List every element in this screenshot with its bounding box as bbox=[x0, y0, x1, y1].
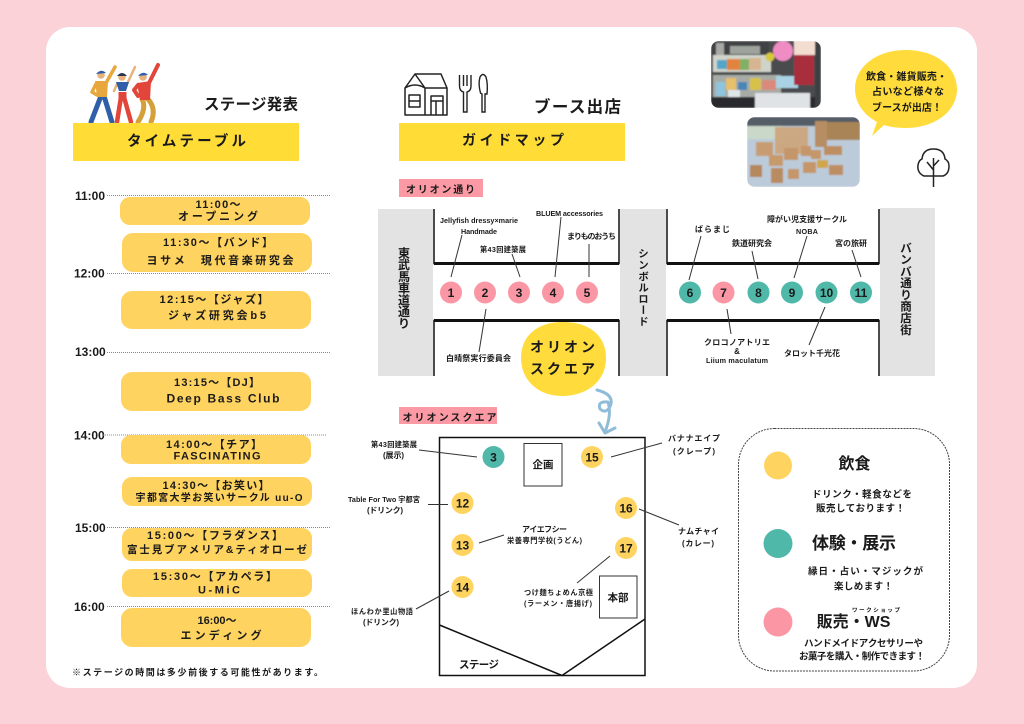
booth markers: square bbox=[452, 446, 637, 598]
legend: food: ドリンク・軽食などを bbox=[812, 488, 912, 500]
booth labels: square bbox=[348, 434, 720, 627]
road label: Banba: バ bbox=[900, 265, 912, 278]
booth labels: square: ナムチャイ bbox=[678, 527, 719, 536]
booth labels: Orion street: 障がい児支援サークル bbox=[767, 214, 847, 224]
road label: Tobu: 道 bbox=[398, 292, 410, 307]
map: square plan bbox=[440, 438, 645, 676]
Orion Square badge: オリオン bbox=[530, 339, 595, 355]
legend: experience: 楽しめます！ bbox=[834, 580, 893, 592]
schedule: ending: 16:00～ bbox=[198, 615, 236, 627]
Orion Square badge: スクエア bbox=[530, 361, 595, 377]
legend panel bbox=[738, 428, 950, 671]
speech bubble bbox=[855, 50, 957, 136]
Orion Square badge bbox=[521, 322, 606, 396]
schedule: jazz bbox=[121, 291, 311, 329]
heading band: timetable: タイムテーブル bbox=[127, 132, 246, 150]
legend: sales bbox=[764, 606, 925, 662]
schedule: a cappella: U-MiC bbox=[198, 584, 240, 596]
booth labels: square: つけ麺ちょめん京極 bbox=[524, 588, 594, 597]
booth markers: Orion street: 6 bbox=[687, 286, 694, 300]
icon: knife bbox=[479, 74, 487, 112]
headquarters booth bbox=[600, 576, 637, 618]
booth markers: Orion street: 10 bbox=[820, 286, 833, 300]
road label: Banba: 通 bbox=[900, 276, 912, 290]
road label: Tobu: 馬 bbox=[398, 270, 410, 284]
booth labels: square: 第43回建築展 bbox=[371, 440, 417, 449]
booth markers: square: 13 bbox=[456, 538, 469, 552]
booth labels: Orion street: 鉄道研究会 bbox=[732, 238, 772, 248]
map: street plan bbox=[378, 208, 935, 376]
section tag: Orion Square bbox=[399, 407, 497, 424]
photo: wooden crafts bbox=[747, 117, 860, 187]
booth markers: Orion street: 7 bbox=[720, 286, 727, 300]
booth markers: square: 16 bbox=[619, 502, 633, 516]
booth labels: Orion street: 宮の旅研 bbox=[835, 238, 867, 248]
road label: Banba: ン bbox=[900, 255, 912, 267]
booth markers: Orion street: 4 bbox=[550, 286, 557, 300]
schedule: jazz: ジャズ研究会b5 bbox=[168, 308, 266, 322]
schedule: jazz: 12:15～【ジャズ】 bbox=[160, 292, 268, 306]
booth labels: square: (ドリンク) bbox=[363, 617, 399, 627]
schedule: hula: 富士見ブアメリア&ティオローゼ bbox=[127, 543, 308, 556]
schedule: band bbox=[122, 233, 312, 272]
schedule: opening: 11:00～ bbox=[196, 199, 240, 211]
booth markers: Orion street: 2 bbox=[482, 286, 489, 300]
booth labels: Orion street: まりものおうち bbox=[567, 231, 616, 241]
booth labels: square: (クレープ) bbox=[673, 446, 715, 456]
booth labels: Orion street: NOBA bbox=[796, 227, 818, 236]
schedule: DJ bbox=[121, 372, 311, 411]
schedule: comedy bbox=[122, 477, 312, 506]
booth labels: Orion street: Liium maculatum bbox=[706, 356, 768, 365]
booth labels: square: 栄養専門学校(うどん) bbox=[507, 536, 583, 545]
road label: Banba bbox=[900, 242, 912, 337]
schedule: opening: オープニング bbox=[178, 209, 258, 223]
booth labels: Orion street: & bbox=[734, 347, 740, 356]
time axis labels and lines: 16:00 bbox=[74, 600, 105, 614]
speech bubble: ブースが出店！ bbox=[872, 101, 942, 114]
schedule: hula bbox=[122, 528, 312, 561]
booth markers: Orion street: 8 bbox=[755, 286, 762, 300]
booth markers: square: 3 bbox=[490, 450, 497, 464]
heading: stage: ステージ発表 bbox=[204, 96, 298, 114]
booth labels: square: アイエフシー bbox=[522, 525, 567, 534]
icon: shop bbox=[405, 74, 447, 115]
road label: Tobu: り bbox=[398, 317, 410, 331]
schedule: cheer bbox=[121, 435, 311, 464]
time axis labels and lines: 13:00 bbox=[75, 345, 106, 359]
photo: goods stall bbox=[711, 41, 821, 108]
booth markers: Orion street: 11 bbox=[855, 286, 868, 300]
icon: fork bbox=[460, 75, 471, 112]
road label: Banba: り bbox=[900, 289, 912, 302]
icon: dancers bbox=[91, 65, 158, 122]
road label: Tobu: 東 bbox=[398, 246, 410, 260]
booth markers: Orion street: 5 bbox=[584, 286, 591, 300]
legend: experience: 体験・展示 bbox=[812, 534, 896, 553]
schedule: comedy: 14:30～【お笑い】 bbox=[162, 478, 270, 492]
legend: sales: 販売・WS bbox=[817, 613, 891, 631]
booth markers: square: 15 bbox=[585, 450, 599, 464]
speech bubble: 飲食・雑貨販売・ bbox=[866, 70, 947, 83]
road label: Tobu bbox=[398, 246, 410, 331]
section tag: Orion street bbox=[399, 179, 483, 197]
schedule: DJ: 13:15～【DJ】 bbox=[174, 376, 260, 389]
planning booth: 企画 bbox=[532, 458, 554, 471]
icon: tree bbox=[918, 149, 949, 187]
booth labels: Orion street: 第43回建築展 bbox=[480, 245, 526, 254]
legend: sales: ワークショップ bbox=[852, 606, 900, 614]
road label: Tobu: 武 bbox=[398, 258, 410, 272]
booth labels: square: バナナエイプ bbox=[668, 434, 720, 443]
headquarters booth: 本部 bbox=[608, 591, 629, 604]
booth labels: Orion street: BLUEM accessories bbox=[536, 209, 603, 218]
booth labels: Orion street: クロコノアトリエ bbox=[704, 337, 770, 347]
section tag: Orion street: オリオン通り bbox=[406, 183, 475, 196]
booth markers: Orion street: 3 bbox=[516, 286, 523, 300]
booth markers: square: 12 bbox=[456, 496, 469, 510]
schedule: band: 11:30～【バンド】 bbox=[163, 236, 273, 249]
booth labels: Orion street: ばらまじ bbox=[695, 224, 730, 234]
road label: Banba: バ bbox=[900, 242, 912, 255]
booth markers: Orion street: 1 bbox=[448, 286, 455, 300]
time axis labels and lines: 11:00 bbox=[75, 189, 105, 203]
stage label: ステージ bbox=[459, 659, 500, 671]
schedule: DJ: Deep Bass Club bbox=[166, 392, 280, 406]
time axis labels and lines: 12:00 bbox=[74, 266, 105, 280]
schedule: cheer: 14:00～【チア】 bbox=[166, 438, 262, 451]
booth labels: Orion street: 白晴祭実行委員会 bbox=[446, 353, 511, 363]
booth markers: Orion street: 9 bbox=[789, 286, 796, 300]
legend: experience: 縁日・占い・マジックが bbox=[808, 566, 923, 578]
schedule: hula: 15:00～【フラダンス】 bbox=[147, 528, 283, 542]
booth labels: square: (ドリンク) bbox=[367, 505, 403, 515]
heading band: guide map bbox=[399, 123, 625, 161]
schedule: cheer: FASCINATING bbox=[174, 450, 260, 462]
planning booth bbox=[524, 444, 562, 486]
schedule: ending: エンディング bbox=[180, 628, 262, 642]
heading: booths: ブース出店 bbox=[534, 96, 621, 116]
heading band: timetable bbox=[73, 123, 299, 161]
booth labels: square: (ラーメン・唐揚げ) bbox=[524, 599, 593, 608]
booth markers: Orion street bbox=[440, 282, 872, 304]
arrow: squiggle bbox=[597, 390, 615, 433]
section tag: Orion Square: オリオンスクエア bbox=[402, 412, 496, 424]
schedule: band: ヨサメ 現代音楽研究会 bbox=[146, 253, 294, 267]
schedule: a cappella bbox=[122, 569, 312, 597]
road label: Tobu: 車 bbox=[398, 281, 410, 296]
legend: sales: ハンドメイドアクセサリーや bbox=[804, 638, 923, 650]
booth labels: square: Table For Two 宇都宮 bbox=[348, 495, 420, 504]
speech bubble: 占いなど様々な bbox=[872, 85, 944, 98]
booth markers: square: 14 bbox=[456, 580, 469, 594]
booth labels: Orion street: Handmade bbox=[461, 227, 497, 236]
booth markers: square: 17 bbox=[619, 542, 633, 556]
booth labels: Orion street: Jellyfish dressy×marie bbox=[440, 216, 518, 225]
legend: food: 販売しております！ bbox=[816, 502, 905, 514]
footnote: ※ステージの時間は多少前後する可能性があります。 bbox=[72, 666, 323, 678]
road label: Symbol Road: シンボルロード bbox=[637, 248, 649, 327]
booth labels: Orion street: タロット千光花 bbox=[784, 348, 840, 358]
heading band: guide map: ガイドマップ bbox=[462, 132, 564, 148]
schedule: a cappella: 15:30～【アカペラ】 bbox=[153, 570, 277, 583]
road label: Tobu: 通 bbox=[398, 304, 410, 319]
road label: Banba: 店 bbox=[900, 312, 912, 325]
booth labels: Orion street bbox=[440, 209, 867, 365]
legend: food bbox=[764, 452, 912, 514]
booth labels: square: ほんわか里山物語 bbox=[351, 607, 413, 616]
legend: experience bbox=[764, 529, 923, 592]
time axis labels and lines: 15:00 bbox=[75, 521, 106, 535]
schedule: comedy: 宇都宮大学お笑いサークル uu-O bbox=[136, 491, 303, 504]
time axis labels and lines bbox=[74, 189, 331, 614]
schedule: opening bbox=[120, 197, 310, 225]
schedule: ending bbox=[121, 608, 311, 647]
booth labels: square: (カレー) bbox=[682, 539, 714, 548]
road label: Banba: 商 bbox=[900, 300, 912, 314]
booth labels: square: (展示) bbox=[383, 451, 404, 460]
legend: sales: お菓子を購入・制作できます！ bbox=[799, 650, 925, 662]
road label: Banba: 街 bbox=[900, 323, 912, 337]
legend: food: 飲食 bbox=[838, 454, 871, 473]
time axis labels and lines: 14:00 bbox=[74, 428, 105, 442]
